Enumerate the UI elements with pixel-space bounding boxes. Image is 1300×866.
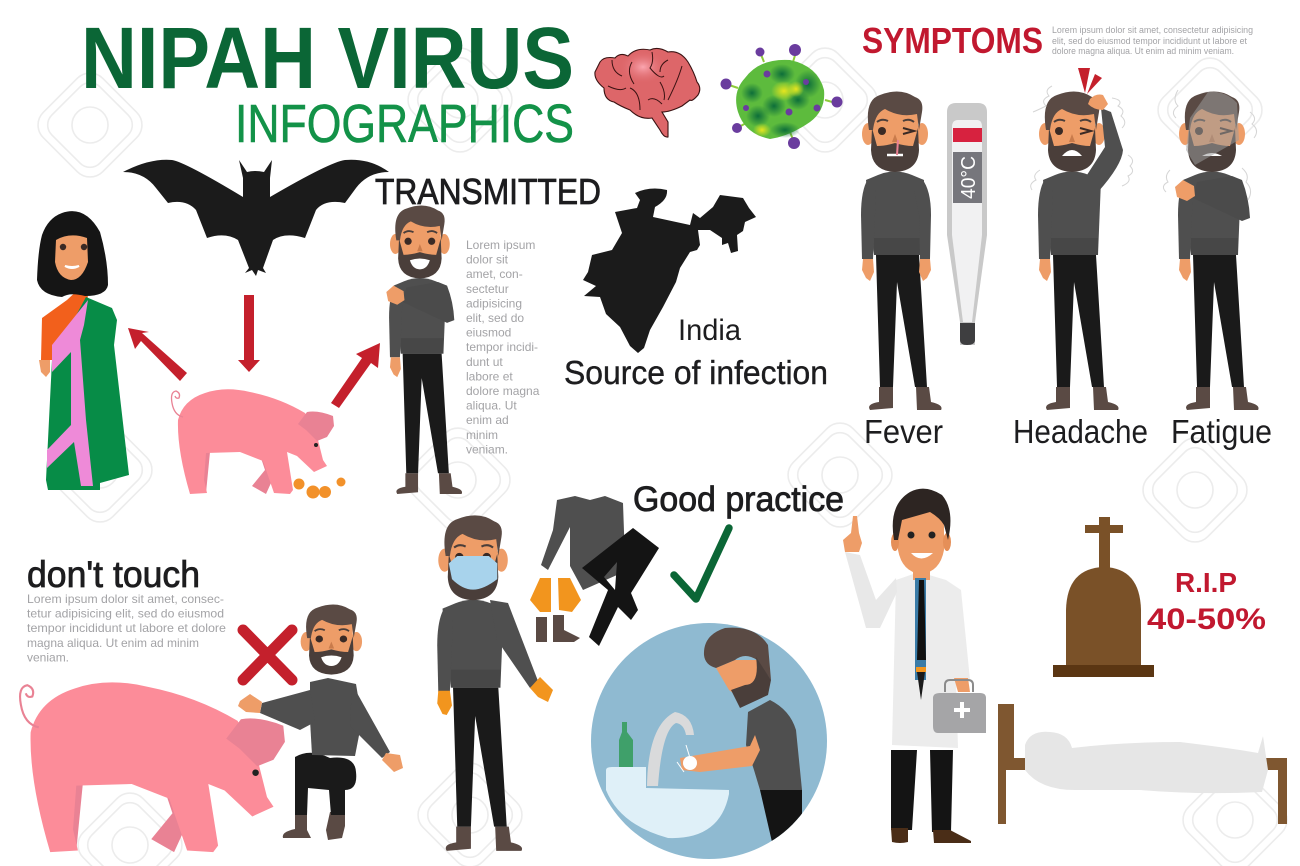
text block: transmitted: elit, sed do (466, 311, 524, 325)
text block: don't touch: magna aliqua. Ut enim ad minim (27, 636, 199, 650)
illustration: covered body on bed (998, 704, 1287, 824)
label: source of infection: Source of infection (564, 354, 828, 391)
map: India (583, 189, 756, 353)
icon: headache shiver lines (1031, 86, 1133, 190)
label: rip (1147, 567, 1266, 636)
figure: pig eating (172, 389, 334, 494)
text block: don't touch (27, 592, 226, 664)
arrow: pig to man (331, 343, 380, 408)
text block: symptoms (1052, 25, 1253, 56)
text block: symptoms: dolore magna aliqua. Ut enim ad minim veniam. (1052, 46, 1234, 56)
text block: transmitted: minim (466, 428, 498, 442)
heading: good practice: Good practice (633, 480, 844, 519)
figure: headache man (1038, 68, 1123, 410)
text block: transmitted: eiusmod (466, 326, 511, 340)
icon: virus (720, 44, 842, 149)
icon: thermometer: 40°C (958, 156, 980, 199)
icon: green check (674, 528, 729, 599)
title: INFOGRAPHICS (235, 94, 574, 154)
text block: don't touch: tempor incididunt ut labore et dolore (27, 621, 226, 635)
heading: transmitted: TRANSMITTED (375, 171, 601, 212)
label: rip: 40-50% (1147, 603, 1266, 636)
figure: transmitted man (386, 205, 462, 494)
figure: man with mask and gloves (437, 515, 553, 851)
text block: transmitted: veniam. (466, 442, 508, 456)
label: fever: Fever (864, 413, 943, 450)
text block: transmitted: Lorem ipsum (466, 238, 535, 252)
text block: transmitted: aliqua. Ut (466, 399, 517, 413)
text block: transmitted: labore et (466, 369, 513, 383)
label: fatigue: Fatigue (1171, 413, 1272, 450)
text block: transmitted: sectetur (466, 282, 509, 296)
text block: transmitted: enim ad (466, 413, 509, 427)
figure: kneeling man (238, 605, 403, 840)
figure: woman in sari (37, 211, 129, 490)
figure: doctor (843, 489, 971, 843)
heading: symptoms: SYMPTOMS (862, 20, 1043, 61)
text block: don't touch: veniam. (27, 650, 69, 664)
arrow: bat to pig (238, 295, 260, 372)
text block: transmitted: dunt ut (466, 355, 503, 369)
figure: fever man (861, 91, 942, 410)
label: India: India (678, 314, 741, 347)
label: headache: Headache (1013, 413, 1148, 450)
text block: transmitted: adipisicing (466, 296, 522, 310)
text block: symptoms: Lorem ipsum dolor sit amet, consectetur adipisicing (1052, 25, 1253, 35)
icon: fruit (294, 478, 346, 498)
icon: bat (123, 160, 389, 276)
heading: don't touch: don't touch (27, 554, 200, 595)
label: rip: R.I.P (1175, 567, 1237, 598)
illustration: hand washing (591, 623, 827, 859)
text block: transmitted: dolore magna (466, 384, 540, 398)
figure: large pig (20, 682, 285, 852)
icon: doctor's medical case (933, 680, 986, 733)
title (81, 10, 574, 154)
arrow: pig to woman (128, 328, 187, 381)
icon: thermometer (947, 103, 987, 345)
text block: transmitted (466, 238, 540, 456)
text block: transmitted: dolor sit (466, 253, 509, 267)
icon: clothes set (530, 496, 659, 646)
figure: fatigue man (1175, 91, 1259, 410)
text block: transmitted: amet, con- (466, 267, 523, 281)
icon: brain (595, 48, 700, 137)
icon: red cross (243, 630, 292, 680)
icon: gravestone (1053, 517, 1154, 677)
text block: don't touch: tetur adipisicing elit, sed do eiusmod (27, 607, 224, 621)
text block: transmitted: tempor incidi- (466, 340, 538, 354)
icon: fatigue shiver lines (1163, 90, 1257, 200)
text block: don't touch: Lorem ipsum dolor sit amet, consec- (27, 592, 224, 606)
title: NIPAH VIRUS (81, 10, 574, 107)
text block: symptoms: elit, sed do eiusmod tempor incididunt ut labore et (1052, 36, 1247, 46)
